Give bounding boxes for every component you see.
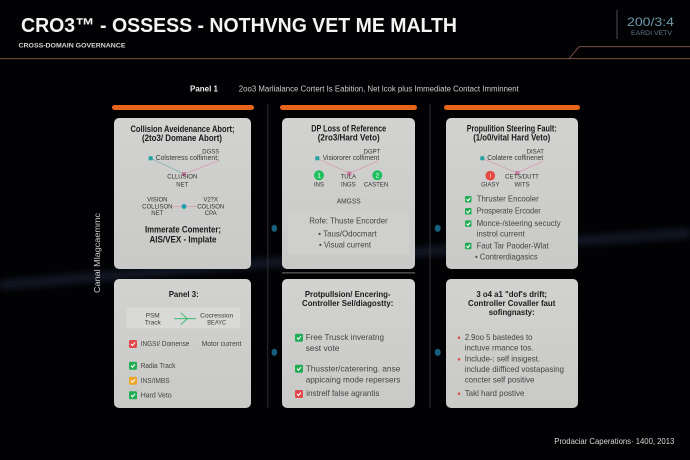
diagram: visual reference: INS: [314, 182, 324, 188]
orange bar: column 1: [112, 105, 254, 110]
diagram: collision net: Colsteress colfiment;: [156, 153, 219, 162]
bullet list: include diifficed vostapasing: [465, 364, 564, 374]
checklist: appicaing mode repersers: [306, 375, 400, 385]
date badge: [617, 10, 674, 39]
bullet list: inctuve rmance tos.: [465, 342, 533, 352]
panel 1 heading: Panel 1: [190, 85, 219, 94]
panel heading: Collision Aveidenance Abort;: [130, 124, 235, 134]
diagram: collision net: [149, 150, 219, 189]
panel heading: (2to3/ Domane Abort): [142, 133, 222, 143]
icon: connector dot upper column 3: [435, 225, 441, 232]
subtitle: CROSS-DOMAIN GOVERNANCE: [18, 43, 126, 50]
checklist: sest vote: [306, 343, 340, 353]
status list: Hard Veto: [141, 393, 172, 400]
diagram: collision net: DGSS: [202, 150, 219, 156]
diagram: vision and v2x: CPA: [205, 211, 217, 217]
role list: • Taus/Odocmart: [318, 228, 377, 238]
checklist: [465, 194, 561, 262]
diagram: collateral: GIASY: [481, 182, 499, 188]
bullet list: Include-: self insigest.: [465, 353, 540, 363]
diagram: collateral: !: [489, 173, 491, 180]
panel heading: Controller Sel/diagostty:: [302, 298, 393, 308]
diagram: collateral: Colatere coffinenet: [487, 153, 544, 162]
panel heading: Protpullsion/ Encering-: [305, 289, 391, 299]
diagram: collateral: WITS: [514, 182, 530, 188]
diagram: vision and v2x: COLLISON: [142, 204, 172, 210]
status list: INS/IMBS: [141, 378, 170, 385]
flow: track to correction: Track: [145, 320, 161, 327]
diagram: collision net: NET: [176, 183, 189, 189]
icon: connector dot upper column 2: [272, 225, 277, 232]
status list: INGSI/ Domense: [141, 341, 189, 348]
checklist: Prosperate Ercoder: [477, 206, 541, 216]
flow: track to correction: PSM: [146, 312, 160, 319]
panel heading: (2ro3/Hard Veto): [318, 133, 380, 143]
panel: propulsion steering fault: [446, 118, 578, 269]
panel heading: Controller Covaller faut: [468, 298, 555, 308]
diagram: visual reference: TULA: [341, 175, 356, 181]
diagram: visual reference: [314, 150, 388, 188]
panel heading: Propulition Steering Fault:: [467, 124, 557, 134]
checklist: Thusster/caterering. anse: [306, 363, 401, 373]
checklist: Thruster Encooler: [477, 194, 539, 204]
panel heading: (1/o0/vital Hard Veto): [473, 133, 550, 143]
role list: Rofe: Thuste Encorder: [309, 216, 388, 226]
panel heading: [302, 289, 393, 308]
flow: track to correction: Cocression: [200, 312, 234, 319]
flow: track to correction: BEAYC: [207, 320, 226, 327]
checklist: [295, 332, 401, 398]
date badge: 200/3:4: [627, 15, 674, 29]
diagram: visual reference: 2: [375, 173, 379, 180]
footer: Prodaciar Caperations· 1400, 2013: [554, 437, 675, 446]
icon: connector dot lower column 2: [272, 349, 277, 356]
panel heading: [468, 289, 555, 317]
diagram: vision and v2x: [142, 198, 224, 217]
checklist: Monce-/steering secucty: [477, 218, 561, 228]
panel: collision avoidance abort: [114, 118, 251, 269]
side label: Canal Mlagcaemmc: [93, 213, 102, 293]
diagram: collision net: CLLUSION: [167, 175, 197, 181]
diagram: collateral: CETS/DUTT: [505, 175, 539, 181]
diagram: visual reference: Visiororer colfiment: [323, 153, 380, 162]
orange bar: column 2: [280, 105, 417, 110]
diagram: vision and v2x: COLISON: [197, 204, 224, 210]
role list: [309, 216, 388, 250]
conclusion text: Immerate Comenter;: [145, 225, 221, 236]
panel heading: DP Loss of Reference: [311, 124, 386, 134]
flow: track to correction: [127, 307, 240, 328]
diagram: vision and v2x: V2?X: [203, 198, 218, 204]
status list: Radia Track: [141, 363, 176, 370]
panel 1 heading: 2oo3 Marlialance Cortert Is Eabition, Net lcok plus Immediate Contact Imminnent: [239, 85, 520, 94]
status list: [129, 340, 241, 400]
icon: connector dot lower column 3: [435, 349, 441, 356]
panel heading: Panel 3:: [169, 289, 199, 299]
panel heading: [311, 124, 386, 143]
role list: • Visual current: [319, 240, 372, 250]
checklist: instrelf false agrantis: [306, 388, 379, 398]
date badge: EARDI VETV: [631, 30, 673, 37]
orange bar: column 3: [444, 105, 580, 110]
diagram: collateral: [480, 150, 544, 188]
diagram: vision and v2x: NET: [151, 211, 164, 217]
diagram: visual reference: 1: [317, 173, 321, 180]
panel heading: [130, 124, 235, 143]
bullet list: Takl hard postive: [465, 388, 525, 398]
panel heading: [467, 124, 557, 143]
checklist: Faut Tar Paoder-Wlat: [477, 240, 549, 250]
panel heading: sofingnasty:: [489, 307, 535, 317]
diagram: collateral: DISAT: [527, 150, 544, 156]
bullet list: 2.9oo 5 bastedes to: [465, 332, 533, 342]
checklist: • Contrerdiagasics: [475, 252, 538, 262]
conclusion text: [145, 225, 221, 246]
checklist: Free Trusck inveratng: [306, 332, 384, 342]
diagram: visual reference: CASTEN: [364, 182, 388, 188]
label: amgss: AMGSS: [337, 197, 361, 206]
panel: controller fault: [446, 279, 578, 408]
panel: dp loss of reference: [282, 118, 415, 269]
title: CRO3™ - OSSESS - NOTHVNG VET ME MALTH: [21, 15, 457, 37]
panel heading: 3 o4 a1 "dof's drift;: [476, 289, 547, 299]
diagram: visual reference: DGPT: [364, 150, 381, 156]
status list: Motor current: [202, 341, 241, 348]
bullet list: concter self positive: [465, 375, 535, 385]
diagram: vision and v2x: VISION: [147, 198, 167, 204]
bullet list: [458, 332, 564, 398]
checklist: instrol current: [477, 228, 525, 238]
panel: propulsion controller self-diagnostic: [282, 279, 415, 408]
panel 3: track correction: [114, 279, 251, 408]
diagram: visual reference: INGS: [341, 182, 356, 188]
conclusion text: AIS/VEX - Implate: [150, 235, 216, 246]
